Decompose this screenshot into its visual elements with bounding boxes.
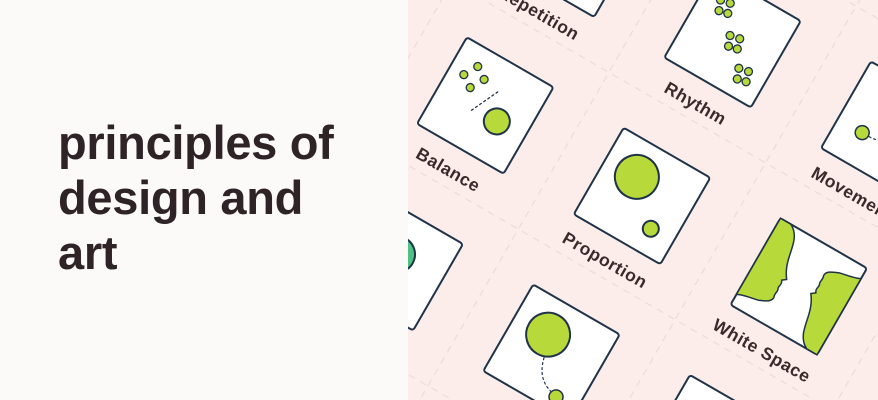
card: bottom right partial (640, 375, 777, 400)
card: Rhythm (647, 0, 801, 137)
title: design and (58, 171, 303, 224)
title: principles of (58, 116, 334, 169)
card: Rhythm: Rhythm (661, 78, 730, 129)
card: Emphasis (bottom) (483, 284, 620, 400)
card: White Space (709, 216, 871, 387)
panel: left title panel (0, 0, 408, 400)
card: White Space: White Space (709, 315, 814, 387)
card: Balance: Balance (413, 143, 484, 196)
card: Proportion: Proportion (559, 228, 651, 292)
card: Movement (804, 61, 878, 227)
title (58, 116, 334, 279)
card: Balance (400, 37, 554, 203)
title: art (58, 226, 117, 279)
card: Proportion (557, 128, 710, 294)
panel: rotated grid of principle cards (408, 0, 878, 400)
card: Repetition (490, 0, 644, 46)
card: left partial (teal circle) (326, 194, 463, 331)
